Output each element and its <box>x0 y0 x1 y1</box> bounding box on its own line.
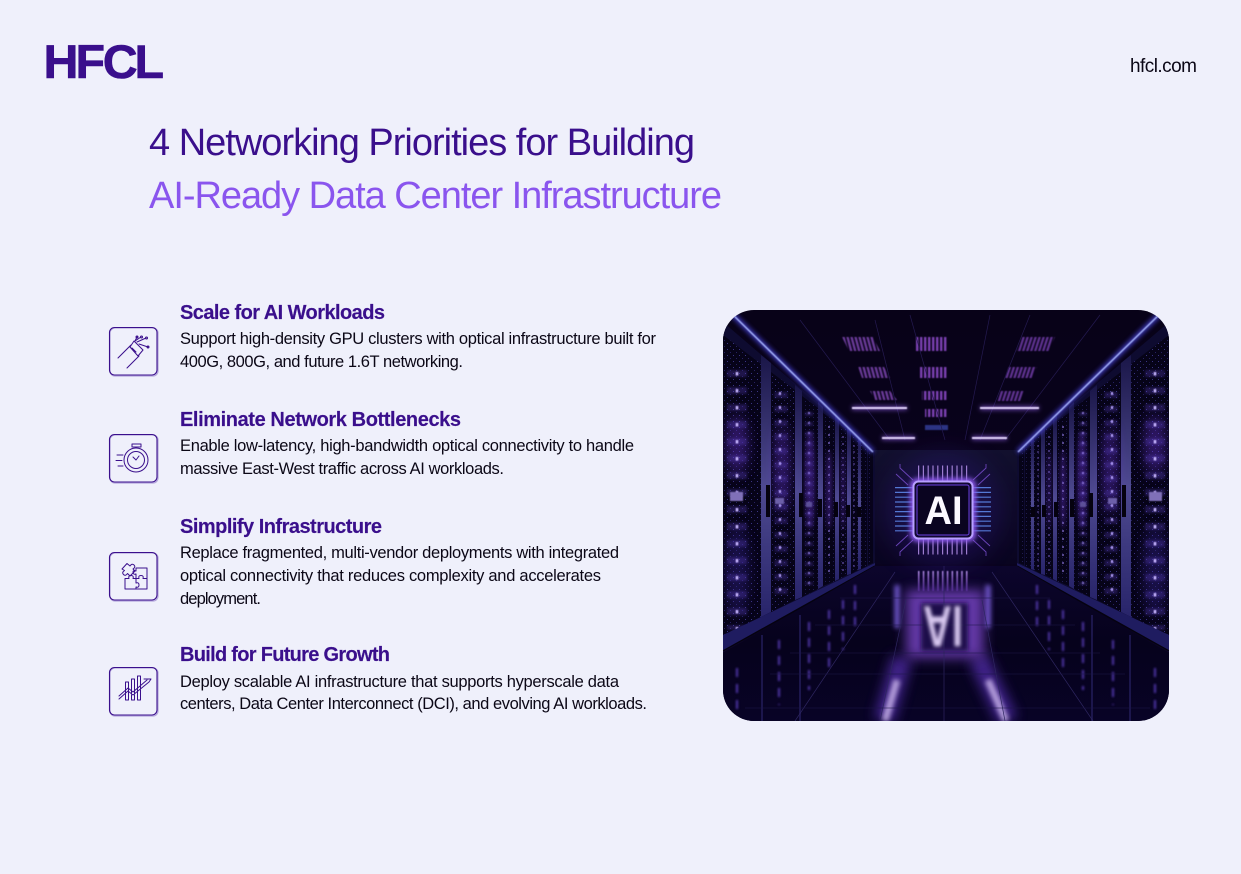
body text: Replace fragmented, multi-vendor deployments with integrated <box>180 544 619 562</box>
back wall <box>873 450 1018 522</box>
heading: Scale for AI Workloads <box>180 302 385 324</box>
icon: fiber optic cable <box>110 328 158 376</box>
logo: HFCL: HFCL <box>43 37 164 89</box>
title: AI-Ready Data Center Infrastructure <box>149 175 722 217</box>
body text <box>180 673 647 713</box>
body text: Enable low-latency, high-bandwidth optical connectivity to handle <box>180 437 634 455</box>
title <box>149 122 722 217</box>
panel: priority 4 <box>110 644 647 716</box>
icon: puzzle pieces <box>110 552 158 601</box>
body text: 400G, 800G, and future 1.6T networking. <box>180 353 463 371</box>
panel: priority 3 <box>110 516 619 608</box>
heading: Eliminate Network Bottlenecks <box>180 409 461 431</box>
icon: growth chart <box>110 668 158 716</box>
AI chip <box>885 452 1001 568</box>
body text: massive East-West traffic across AI workloads. <box>180 460 504 478</box>
panel: priority 1 <box>110 302 656 376</box>
body text <box>180 330 656 371</box>
chip pins <box>896 464 990 556</box>
left server racks <box>723 322 875 652</box>
body text <box>180 544 619 608</box>
heading: Simplify Infrastructure <box>180 516 382 538</box>
ceiling vents and lights <box>800 315 1100 440</box>
floor <box>723 566 1169 721</box>
body text <box>180 437 634 478</box>
reflected AI text: AI <box>923 593 963 658</box>
right server racks <box>1017 322 1169 652</box>
image: AI data center corridor <box>723 310 1169 721</box>
AI chip: AI <box>924 489 962 533</box>
body text: Support high-density GPU clusters with optical infrastructure built for <box>180 330 656 348</box>
panel: priority 2 <box>110 409 634 483</box>
icon: stopwatch <box>110 434 158 483</box>
body text: Deploy scalable AI infrastructure that supports hyperscale data <box>180 673 620 691</box>
body text: optical connectivity that reduces complexity and accelerates <box>180 567 601 585</box>
neon light strips <box>728 310 1164 452</box>
website link: hfcl.com <box>1130 56 1197 77</box>
body text: centers, Data Center Interconnect (DCI), and evolving AI workloads. <box>180 695 647 713</box>
heading: Build for Future Growth <box>180 644 390 666</box>
body text: deployment. <box>180 590 261 608</box>
title: 4 Networking Priorities for Building <box>149 122 695 164</box>
